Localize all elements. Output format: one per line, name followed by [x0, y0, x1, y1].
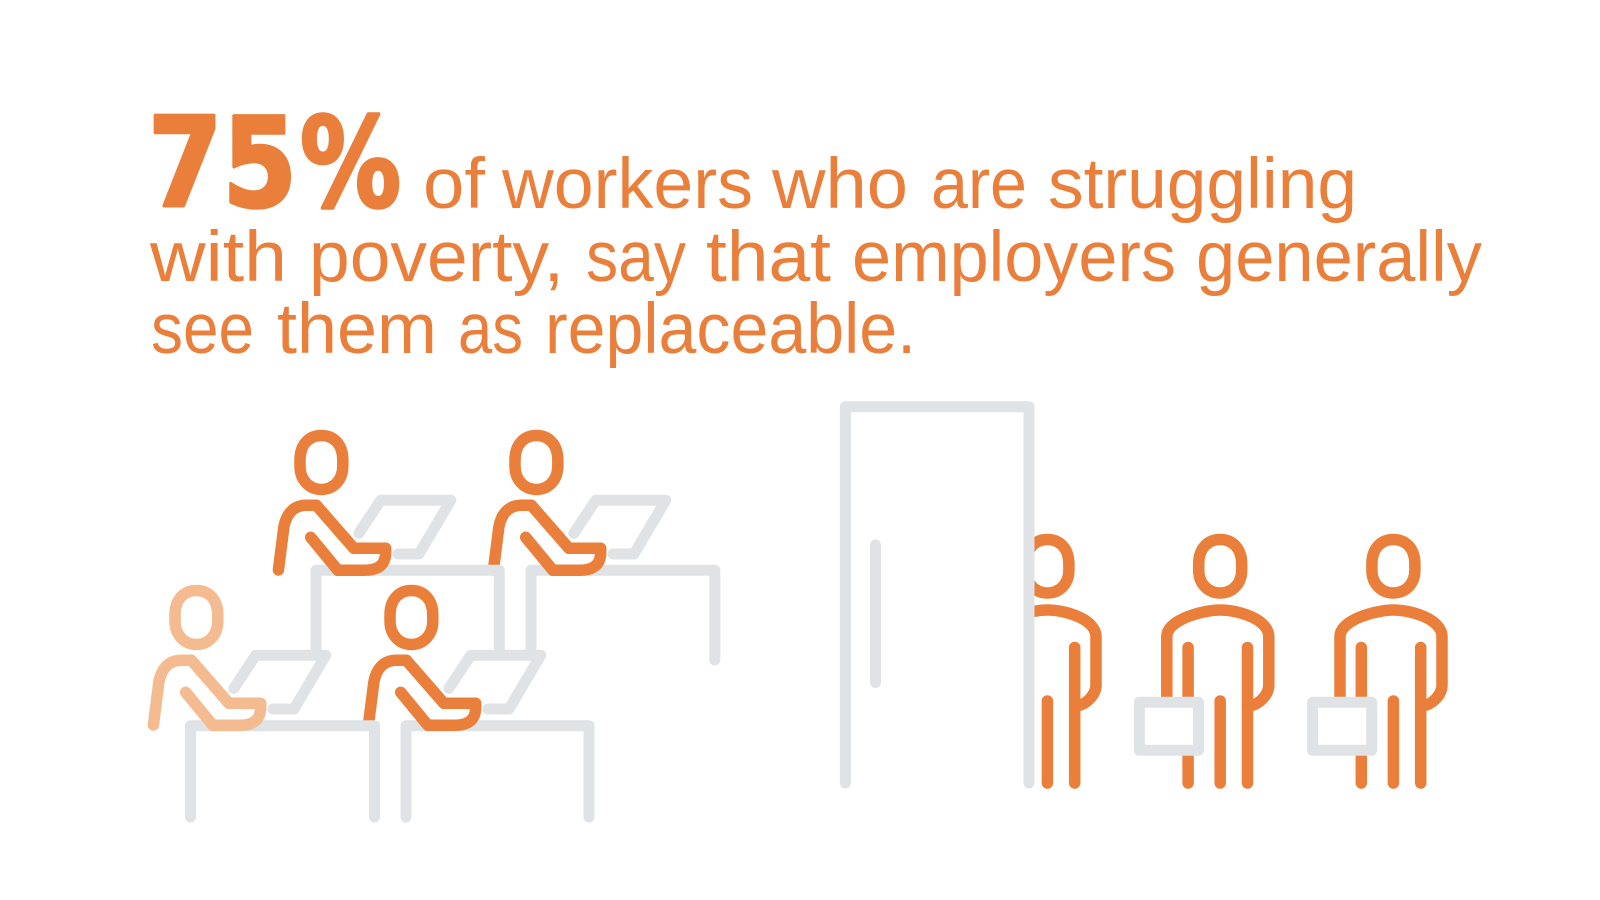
headline line 2: employers [852, 218, 1176, 297]
worker with laptop: bottom right [368, 590, 541, 725]
queue of job seekers at door [845, 407, 1442, 795]
headline line 2: with [149, 218, 287, 297]
headline line 2: that [706, 218, 831, 297]
worker with laptop: bottom left, faded [153, 590, 326, 725]
person with briefcase: middle [1139, 540, 1269, 783]
statistic: 75% [148, 92, 401, 236]
headline line 2 [149, 218, 1482, 297]
worker with laptop: top left [278, 436, 451, 570]
headline line 2: say [586, 218, 686, 297]
headline line 3: replaceable. [545, 290, 916, 369]
statistic: 75%: 75 [148, 92, 297, 236]
headline line 3: see [151, 290, 254, 369]
desk: top right [531, 570, 715, 660]
headline line 3: them [277, 290, 437, 369]
headline line 1: are [931, 145, 1027, 224]
headline line 1: struggling [1048, 145, 1357, 224]
statistic: 75%: % [300, 92, 401, 236]
headline line 3 [151, 290, 916, 369]
headline line 2: generally [1196, 218, 1482, 297]
headline line 1: who [771, 145, 908, 224]
headline line 1 [423, 145, 1357, 224]
worker with laptop: top right [493, 436, 666, 570]
headline [148, 92, 1482, 369]
desk: bottom left [190, 726, 374, 817]
person with briefcase: right [1313, 540, 1442, 783]
headline line 1: of [423, 145, 485, 224]
headline line 1: workers [501, 145, 753, 224]
headline line 2: poverty, [309, 218, 564, 297]
desk: top left [316, 570, 499, 655]
desk: bottom right [406, 726, 589, 817]
person entering door [994, 540, 1096, 783]
headline line 3: as [458, 290, 523, 369]
seated workers at desks [153, 436, 715, 817]
door [845, 407, 1029, 795]
